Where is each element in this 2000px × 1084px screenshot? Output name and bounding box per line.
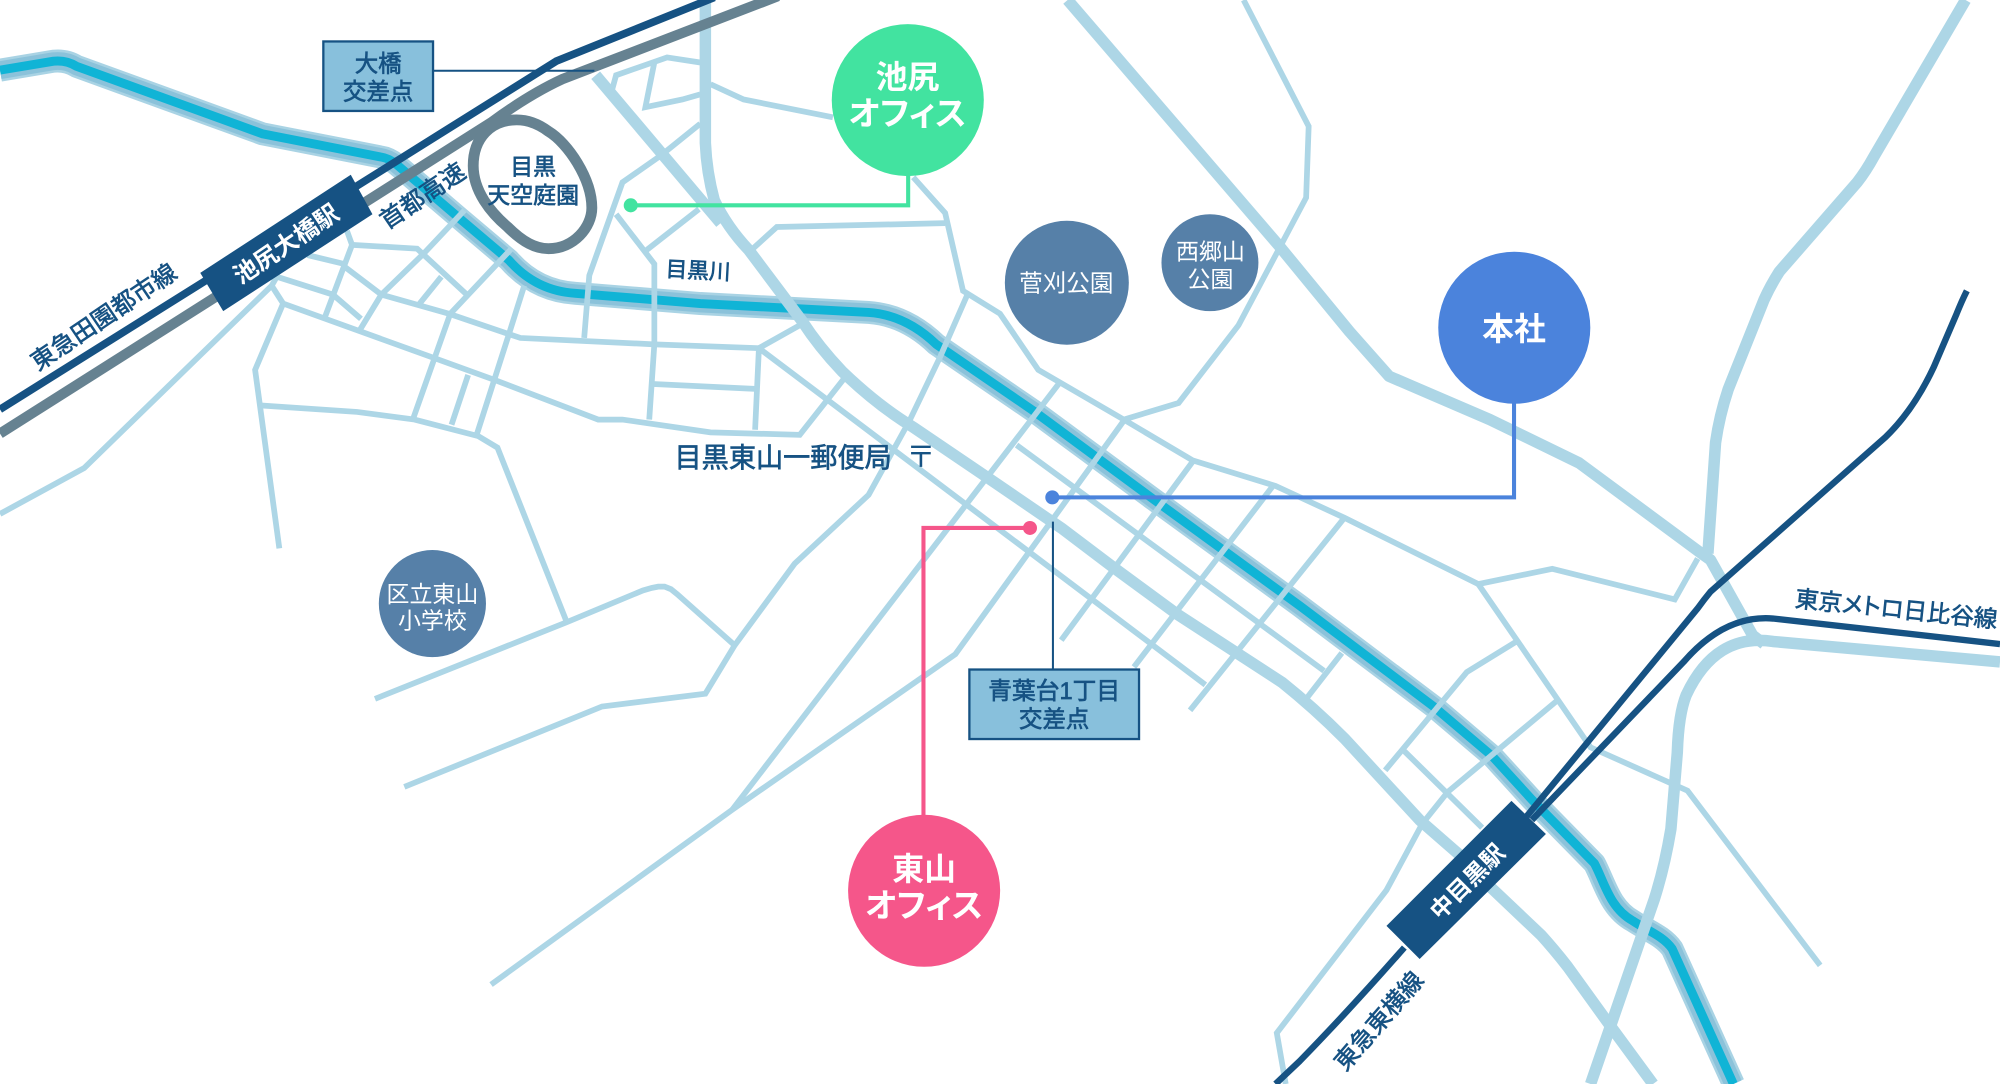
location: Higashiyama office: オフィス	[865, 888, 983, 925]
railway: Tokyo Metro Hibiya Line	[1532, 618, 2000, 820]
station: Nakameguro: 中目黒駅	[1425, 839, 1510, 924]
callout: Aobadai 1-chome junction: 交差点	[1019, 706, 1089, 732]
callout: Ohashi junction: 大橋	[355, 50, 402, 76]
location: Head office: 本社	[1482, 311, 1546, 347]
park marker: Saigoyama Park: 公園	[1188, 266, 1233, 292]
location: Head office	[1045, 252, 1590, 504]
label: Shuto Expressway: 首都高速	[375, 158, 471, 235]
callout: Aobadai 1-chome junction	[969, 522, 1139, 739]
label: Meguro River: 目黒川	[665, 256, 731, 285]
location: Ikejiri office	[624, 24, 984, 212]
park: Meguro Sky Garden: 目黒	[510, 154, 556, 180]
location: Ikejiri office: オフィス	[849, 96, 966, 133]
park: Meguro Sky Garden: 天空庭園	[487, 182, 579, 208]
thick main roads	[596, 0, 2000, 1084]
station: Ikejiri-Ohashi	[200, 175, 372, 311]
school marker: Higashiyama Elementary	[379, 550, 486, 657]
label: post office: 目黒東山一郵便局	[675, 442, 892, 473]
location: Ikejiri office: 池尻	[876, 59, 940, 95]
school marker: Higashiyama Elementary: 小学校	[398, 608, 467, 634]
callout: Ohashi junction: 交差点	[343, 78, 413, 104]
railway: Tokyu Den-en-toshi Line	[0, 0, 714, 409]
park marker: Saigoyama Park: 西郷山	[1176, 239, 1245, 265]
station: Ikejiri-Ohashi: 池尻大橋駅	[229, 200, 344, 290]
park: Meguro Sky Garden	[473, 120, 592, 249]
station: Nakameguro	[1386, 801, 1546, 959]
location: Higashiyama office	[848, 521, 1037, 967]
label: Hibiya Line: 東京メトロ日比谷線	[1794, 586, 1999, 633]
railway: Tokyu Toyoko Line	[1276, 291, 1967, 1084]
park marker: Sugekari Park: 菅刈公園	[1019, 270, 1113, 296]
label: Tokyu Den-en-toshi Line: 東急田園都市線	[26, 259, 182, 376]
park marker: Saigoyama Park	[1161, 214, 1258, 311]
icon: post office mark: 〒	[906, 441, 936, 474]
expressway: Shuto Expressway	[0, 0, 778, 434]
label: Toyoko Line: 東急東横線	[1330, 967, 1429, 1076]
callout: Aobadai 1-chome junction: 青葉台1丁目	[988, 678, 1120, 705]
school marker: Higashiyama Elementary: 区立東山	[387, 581, 478, 607]
location: Higashiyama office: 東山	[892, 851, 956, 887]
park marker: Sugekari Park	[1005, 221, 1129, 345]
callout: Ohashi junction	[323, 41, 594, 111]
